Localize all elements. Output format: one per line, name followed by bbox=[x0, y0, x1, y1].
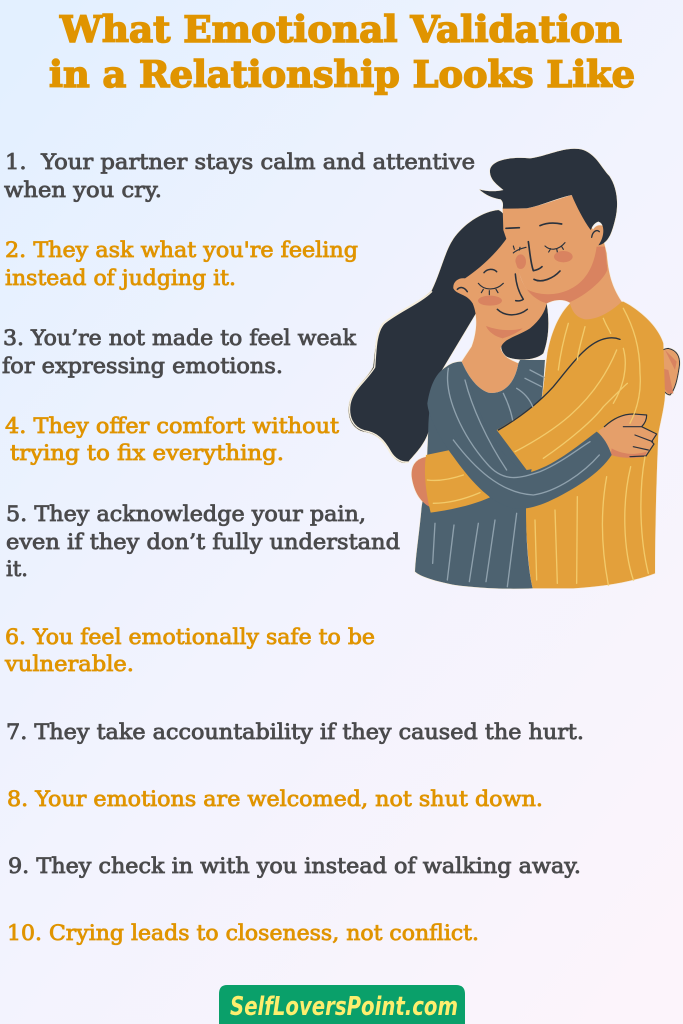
woman's sweater bbox=[415, 360, 545, 589]
logo badge bbox=[219, 985, 465, 1024]
list item 5 bbox=[6, 502, 400, 581]
list item 5: it. bbox=[6, 557, 28, 581]
sweater ribs yellow bbox=[427, 308, 648, 585]
list item 10: 10. Crying leads to closeness, not conflict. bbox=[7, 921, 479, 945]
list item 7: 7. They take accountability if they caused the hurt. bbox=[6, 720, 584, 744]
woman's neck and face bbox=[453, 236, 547, 393]
list item 2: 2. They ask what you're feeling bbox=[5, 238, 358, 262]
man's facial features bbox=[506, 223, 565, 281]
man's far hand bbox=[653, 348, 680, 395]
woman's hand bbox=[598, 414, 657, 458]
man's hair bbox=[479, 149, 617, 245]
sweater ribs grey bbox=[433, 368, 599, 587]
man's neck shadow bbox=[525, 247, 607, 303]
list item 4: 4. They offer comfort without bbox=[5, 414, 340, 438]
man's sweater bbox=[497, 302, 665, 588]
list item 8: 8. Your emotions are welcomed, not shut down. bbox=[7, 787, 543, 811]
list item 4 bbox=[5, 414, 340, 465]
list item 3: for expressing emotions. bbox=[2, 354, 283, 378]
title: in a Relationship Looks Like bbox=[49, 54, 635, 96]
list item 5: even if they don’t fully understand bbox=[6, 530, 400, 554]
woman's arm bbox=[427, 366, 612, 509]
badge background bbox=[219, 985, 465, 1024]
list item 6: vulnerable. bbox=[4, 652, 134, 676]
list item 3: 3. You’re not made to feel weak bbox=[3, 326, 356, 350]
website name: SelfLoversPoint.com bbox=[230, 992, 458, 1022]
illustration: hugging couple bbox=[349, 149, 680, 589]
man's yellow cuff bbox=[425, 450, 490, 513]
title bbox=[49, 9, 635, 96]
man's arm bbox=[497, 338, 627, 470]
woman's hair bbox=[349, 210, 548, 463]
woman's chin shadow bbox=[486, 326, 523, 338]
list item 5: 5. They acknowledge your pain, bbox=[6, 502, 366, 526]
man's cheeks bbox=[554, 251, 573, 262]
list item 4: trying to fix everything. bbox=[10, 441, 284, 465]
list item 1: when you cry. bbox=[4, 178, 162, 202]
man's ear bbox=[592, 225, 606, 246]
list item 3 bbox=[2, 326, 356, 378]
title: What Emotional Validation bbox=[59, 9, 622, 51]
arm contour line bbox=[498, 338, 620, 430]
man's hand behind woman bbox=[412, 457, 431, 507]
man's neck and face bbox=[503, 195, 622, 319]
list item 6 bbox=[4, 625, 375, 676]
list item 2 bbox=[5, 238, 358, 290]
list item 6: 6. You feel emotionally safe to be bbox=[5, 625, 375, 649]
woman's cheek bbox=[478, 296, 502, 306]
woman's facial features bbox=[457, 269, 527, 315]
list item 9: 9. They check in with you instead of walking away. bbox=[8, 854, 581, 878]
list item 1 bbox=[4, 150, 475, 202]
list item 1: 1. Your partner stays calm and attentive bbox=[5, 150, 475, 174]
hair highlight strand bbox=[350, 292, 432, 462]
list item 2: instead of judging it. bbox=[5, 266, 236, 290]
